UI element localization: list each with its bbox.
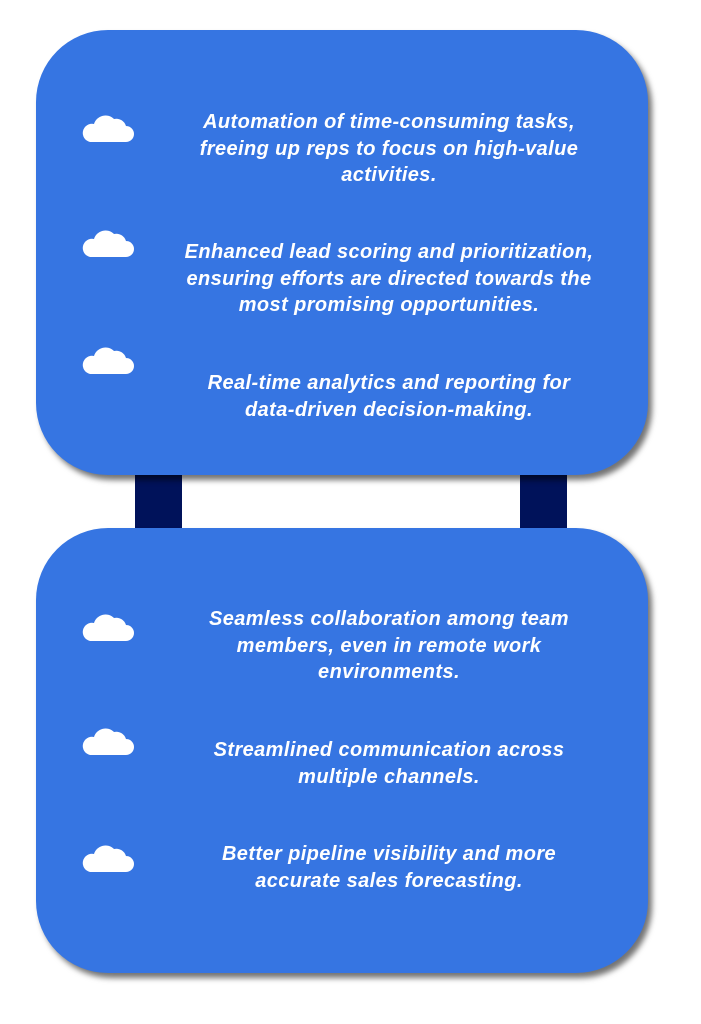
text: item 6: [222, 843, 556, 892]
icon: cloud 1: [82, 116, 134, 142]
text: item 6: accurate sales forecasting.: [255, 870, 523, 892]
text: item 5: [214, 739, 564, 788]
icon: cloud 2: [82, 230, 134, 257]
text: item 4: Seamless collaboration among team: [209, 608, 569, 630]
text: item 5: multiple channels.: [298, 766, 480, 788]
text: item 2: Enhanced lead scoring and prioritization,: [185, 241, 593, 263]
text: item 3: Real-time analytics and reporting for: [208, 372, 570, 394]
text: item 5: Streamlined communication across: [214, 739, 564, 761]
text: item 4: [209, 608, 569, 683]
text: item 3: data-driven decision-making.: [245, 398, 533, 420]
text: item 6: Better pipeline visibility and more: [222, 843, 556, 865]
text: item 2: most promising opportunities.: [239, 294, 539, 316]
icon: cloud 6: [82, 846, 134, 872]
connector: right: [520, 474, 567, 530]
text: item 1: Automation of time-consuming tasks,: [203, 111, 575, 133]
text: item 1: [200, 111, 578, 186]
text: item 4: members, even in remote work: [237, 634, 541, 656]
panel: bottom: [36, 528, 648, 973]
text: item 2: [185, 241, 593, 316]
text: item 1: freeing up reps to focus on high-value: [200, 138, 578, 160]
icon: cloud 4: [82, 614, 134, 641]
icon: cloud 5: [82, 728, 134, 755]
text: item 2: ensuring efforts are directed towards the: [186, 268, 592, 290]
text: item 3: [208, 372, 571, 420]
connector: left: [135, 474, 182, 530]
panel: top: [36, 30, 648, 475]
text: item 1: activities.: [341, 164, 437, 186]
text: item 4: environments.: [318, 661, 460, 683]
icon: cloud 3: [82, 348, 134, 374]
